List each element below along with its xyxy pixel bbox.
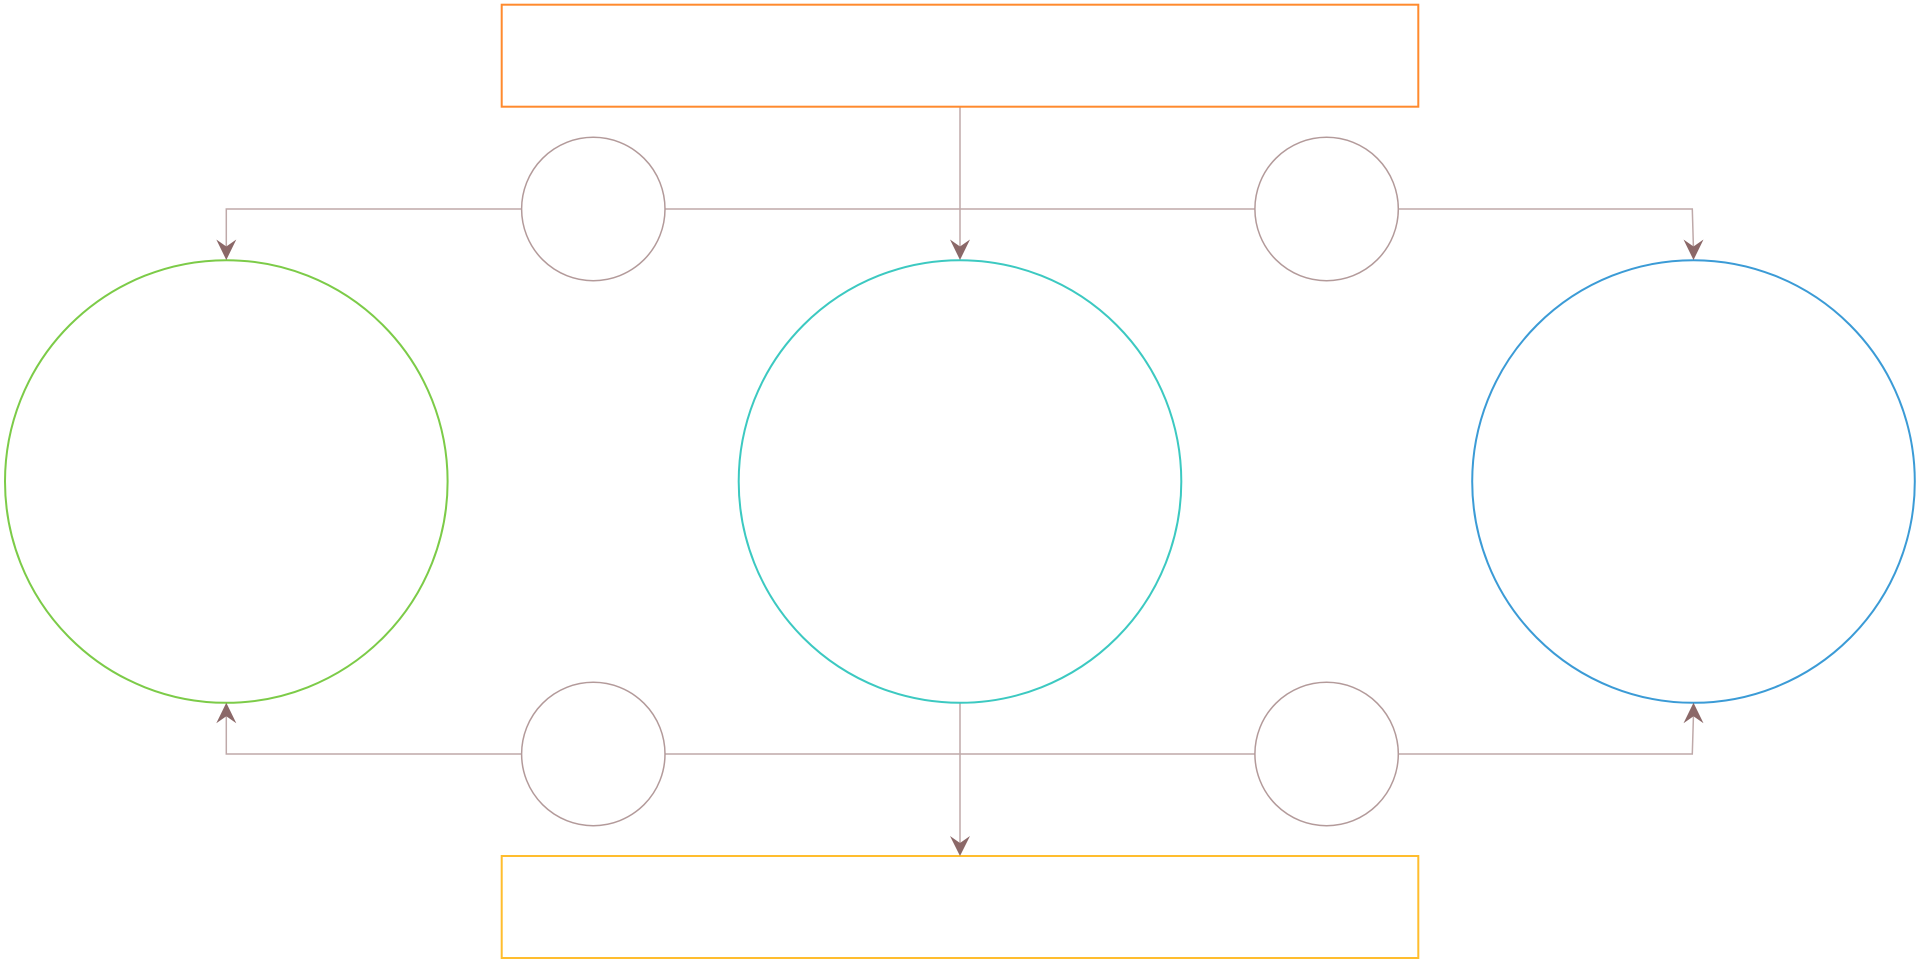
arrow: into center circle from top bbox=[950, 240, 970, 260]
connectors: bottom bbox=[226, 702, 1693, 847]
node: top right small circle bbox=[1255, 137, 1398, 281]
panel: top box bbox=[502, 5, 1418, 107]
panel: right large circle bbox=[1472, 260, 1915, 703]
node: top left small circle bbox=[522, 137, 665, 281]
arrow: into right circle from bottom bbox=[1684, 703, 1704, 723]
node: bottom left small circle bbox=[522, 682, 665, 826]
arrow: into left circle from bottom bbox=[216, 703, 236, 723]
arrow: into left circle from top bbox=[216, 240, 236, 260]
node: bottom right small circle bbox=[1255, 682, 1398, 826]
arrow: into bottom box bbox=[950, 836, 970, 856]
panel: bottom box bbox=[502, 856, 1418, 958]
connectors: top bbox=[226, 106, 1693, 252]
panel: center large circle bbox=[739, 260, 1181, 703]
panel: left large circle bbox=[5, 260, 448, 703]
arrow: into right circle from top bbox=[1684, 240, 1704, 260]
